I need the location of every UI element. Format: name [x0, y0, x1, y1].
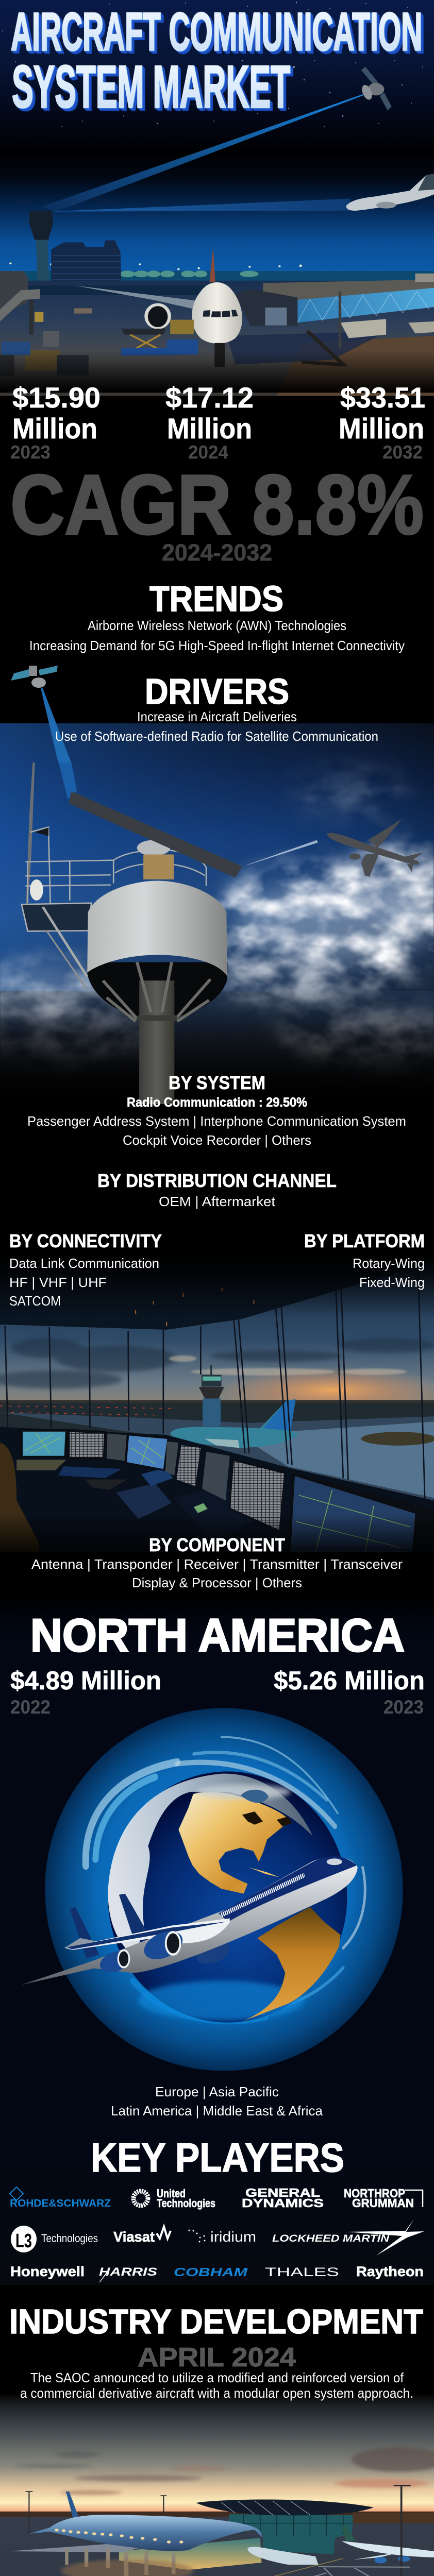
- platform item 1: Rotary-Wing: [353, 1256, 425, 1271]
- runway: [0, 1413, 434, 1500]
- sky: [0, 723, 434, 1105]
- stat 2032: Million: [339, 412, 424, 445]
- date: april 2024: APRIL 2024: [138, 2343, 296, 2372]
- canopy roof: [196, 2500, 374, 2515]
- horizon land: [0, 2512, 434, 2524]
- runway strip: [28, 285, 205, 295]
- logo: Harris: HARRIS: [99, 2265, 157, 2278]
- logo: United Technologies: United: [157, 2187, 186, 2200]
- far engine: [194, 1938, 232, 1968]
- distribution list: OEM | Aftermarket: [159, 1194, 276, 1209]
- year 2022: 2022: [10, 1697, 51, 1718]
- tail fin lower: [70, 1907, 99, 1958]
- icon: small satellite: [11, 666, 58, 688]
- tail fin upper: [119, 1894, 147, 1935]
- logo: Thales: THALES: [265, 2265, 339, 2279]
- blue uplink beam: [59, 762, 77, 799]
- window strip: [222, 1875, 305, 1915]
- title: [11, 2, 422, 120]
- rear engine intake: [118, 1950, 129, 1968]
- tower pole: [139, 980, 174, 1104]
- lower fade: [0, 1010, 434, 1105]
- panel: trends: [29, 579, 405, 653]
- Greenland and Arctic: [241, 1790, 269, 1803]
- logo: Lockheed Martin: LOCKHEED MARTIN: [272, 2233, 390, 2244]
- terminal building: [51, 241, 121, 285]
- satellite beam: [41, 688, 71, 762]
- back building mullions: [230, 2515, 352, 2536]
- swirl streaks: [86, 1737, 365, 2021]
- panel: north america heading and values: [10, 1610, 425, 1718]
- logo: Viasat: [113, 2227, 171, 2245]
- logo: Iridium: iridium: [210, 2229, 256, 2245]
- railing platform: [25, 827, 206, 903]
- driver item 1: Increase in Aircraft Deliveries: [137, 709, 297, 724]
- stat 2023: Million: [12, 412, 97, 445]
- logo: Lockheed Martin: [272, 2219, 424, 2256]
- Arctic haze over land: [196, 1785, 291, 1799]
- window mullions: [5, 1264, 425, 1500]
- radar drum: [87, 881, 227, 977]
- apron markings: [293, 2567, 410, 2576]
- left terminal gate and stairs: [0, 271, 40, 335]
- heading: connectivity: BY CONNECTIVITY: [9, 1230, 162, 1251]
- panel: industry development: [9, 2302, 423, 2401]
- logo: General Dynamics: GENERAL: [245, 2186, 320, 2199]
- sky through windows: [0, 1261, 434, 1403]
- panel: by distribution channel: [97, 1170, 337, 1209]
- console keyboards: [16, 1460, 263, 1543]
- logo: Rohde & Schwarz: [10, 2187, 111, 2209]
- globe cloud haze: [108, 1774, 313, 1958]
- logo: Honeywell: Honeywell: [10, 2264, 85, 2279]
- passenger boarding bridge: [235, 274, 434, 365]
- panel: airport terminal sunset: [0, 2285, 434, 2576]
- system list 1: Passenger Address System | Interphone Communication System: [27, 1113, 406, 1129]
- logo: Raytheon: Raytheon: [356, 2264, 424, 2279]
- panel: control room photo: [0, 1252, 434, 1552]
- right airliner: [342, 2526, 434, 2564]
- deck: [22, 903, 91, 989]
- logo: L3 Technologies: Technologies: [41, 2232, 98, 2245]
- blue sky tint: [0, 723, 434, 991]
- near engine: [141, 1926, 186, 1964]
- ceiling: [0, 1253, 434, 1330]
- horizon lights: [0, 1400, 434, 1427]
- stat 2024: $17.12: [165, 381, 254, 414]
- console desk: [0, 1427, 434, 1552]
- apron far edge on right: [353, 2513, 434, 2523]
- stat 2032: [339, 381, 425, 463]
- wet apron: [238, 1421, 434, 1498]
- panel: by component: [0, 1534, 434, 1595]
- panel: market size stats: [10, 381, 425, 566]
- starfield: [2, 2, 423, 127]
- logo: United Technologies: [133, 2187, 215, 2210]
- North America landmass: [178, 1792, 291, 1894]
- signal beam tower to satellite: [42, 94, 363, 212]
- globe ocean: [108, 1771, 347, 2023]
- panel: by system: [27, 1072, 406, 1148]
- trend item 1: Airborne Wireless Network (AWN) Technologies: [88, 618, 346, 633]
- regions line 1: Europe | Asia Pacific: [155, 2084, 279, 2099]
- soft cloud base: [0, 855, 434, 1015]
- heading: north america: NORTH AMERICA: [30, 1610, 405, 1662]
- heading: by system: BY SYSTEM: [169, 1072, 265, 1093]
- development text line 1: The SAOC announced to utilize a modified and reinforced version of: [30, 2370, 404, 2385]
- radar antenna bar: [69, 791, 242, 877]
- value 2023: $5.26 Million: [274, 1666, 425, 1695]
- year 2023: 2023: [383, 1697, 424, 1718]
- regions line 2: Latin America | Middle East & Africa: [111, 2103, 323, 2119]
- platform item 2: Fixed-Wing: [359, 1275, 425, 1290]
- development text line 2: a commercial derivative aircraft with a modular open system approach.: [20, 2385, 413, 2401]
- wing: [65, 1919, 230, 1950]
- lower ocean glow: [138, 1981, 305, 2020]
- stat 2024: [165, 381, 254, 463]
- airfield ground: [0, 1401, 434, 1437]
- CAGR period: 2024-2032: [162, 539, 272, 566]
- radar antenna pedestal: [137, 840, 174, 879]
- ceiling lights: [135, 1287, 255, 1326]
- panel: drivers: [11, 666, 378, 762]
- icon: satellite: [360, 66, 392, 110]
- panel: key players: [10, 2134, 424, 2282]
- light clouds: [169, 1355, 407, 1376]
- top fade: [0, 1252, 434, 1318]
- panel: other regions: [111, 2084, 323, 2119]
- terminal wing lower: [8, 2544, 138, 2552]
- blue airliner outside: [170, 1399, 299, 1448]
- sunset clouds: [14, 2447, 434, 2495]
- wing navy line: [66, 1922, 227, 1949]
- apron dark shadow: [227, 331, 388, 365]
- aircraft over clouds: [327, 819, 424, 877]
- lit lower hall: [119, 2538, 261, 2570]
- stat 2024: 2024: [188, 442, 228, 463]
- icon: aircraft in flight: [346, 174, 434, 211]
- Great Lakes: [242, 1811, 292, 1826]
- heading: drivers: DRIVERS: [145, 671, 289, 711]
- heading: platform: BY PLATFORM: [304, 1230, 425, 1251]
- panel: by platform: [304, 1230, 425, 1290]
- logo: L3 Technologies: [11, 2226, 98, 2252]
- main aircraft-shaped terminal roof: [29, 2515, 262, 2551]
- pole struts: [103, 962, 210, 1021]
- parked airliner: [75, 247, 242, 367]
- grass island: [361, 1432, 434, 1446]
- component list 1: Antenna | Transponder | Receiver | Transmitter | Transceiver: [31, 1556, 403, 1572]
- apron: [0, 2517, 434, 2576]
- fuselage navy top: [219, 1856, 356, 1922]
- connectivity item 3: SATCOM: [9, 1293, 61, 1309]
- Caribbean islands: [249, 1868, 279, 1877]
- trend item 2: Increasing Demand for 5G High-Speed In-flight Internet Connectivity: [29, 638, 405, 653]
- logo: General Dynamics: [242, 2186, 324, 2210]
- ground support equipment: [0, 308, 198, 376]
- distant control tower: [199, 1365, 224, 1426]
- city lights horizon: [0, 262, 434, 282]
- logo: Northrop Grumman: GRUMMAN: [352, 2196, 414, 2210]
- system list 2: Cockpit Voice Recorder | Others: [123, 1132, 311, 1148]
- apron ground: [0, 281, 434, 396]
- heading: distribution channel: BY DISTRIBUTION CHANNEL: [97, 1170, 337, 1191]
- connectivity item 1: Data Link Communication: [9, 1256, 159, 1271]
- glow on apron: [61, 2560, 194, 2576]
- orange chair: [0, 1443, 39, 1552]
- panel: regional globe: [0, 1595, 434, 2285]
- monitor map lines: [25, 1433, 410, 1552]
- logo: United Technologies: Technologies: [157, 2197, 215, 2210]
- black strip under radar: [0, 1105, 434, 1253]
- pole collar: [137, 1015, 177, 1021]
- logo: Iridium: [189, 2229, 256, 2245]
- near engine intake: [166, 1932, 180, 1955]
- fuselage: [22, 1857, 358, 1985]
- black band below photo: [0, 1552, 434, 1595]
- panel: by connectivity: [9, 1230, 162, 1309]
- panel: radar tower photo: [0, 723, 434, 1105]
- small dome: [30, 879, 43, 901]
- logo: Northrop Grumman: NORTHROP: [344, 2187, 405, 2200]
- dark navy backdrop: [0, 1595, 434, 2285]
- logo: L3 Technologies: L3: [15, 2230, 32, 2252]
- logo: General Dynamics: DYNAMICS: [242, 2196, 324, 2210]
- contrail: [245, 840, 318, 866]
- sunset glow: [216, 1366, 434, 1414]
- monitors: [20, 1429, 434, 1552]
- back building glass: [229, 2514, 353, 2554]
- tailplane: [64, 1938, 97, 1948]
- bottom fade: [0, 1514, 434, 1552]
- logo: Rohde & Schwarz: ROHDE&SCHWARZ: [10, 2198, 111, 2209]
- stat 2023: $15.90: [12, 381, 101, 414]
- value 2022: $4.89 Million: [10, 1666, 161, 1695]
- panel: hero airport illustration: [0, 0, 434, 396]
- rear engine: [98, 1947, 132, 1976]
- light poles: [25, 2485, 411, 2576]
- sunset sky: [0, 2285, 434, 2514]
- terminal columns: [65, 2548, 175, 2576]
- dark storm clouds: [0, 1338, 434, 1388]
- roof lights row: [55, 2529, 183, 2544]
- fade to black: [0, 350, 434, 393]
- glowing orb: [45, 1708, 403, 2071]
- plane tail fin: [66, 2492, 81, 2526]
- stat 2032: $33.51: [340, 381, 425, 414]
- driver item 2: Use of Software-defined Radio for Satellite Communication: [55, 728, 378, 744]
- stat 2023: 2023: [10, 442, 51, 463]
- canopy ribs: [222, 2501, 310, 2515]
- component list 2: Display & Processor | Others: [132, 1575, 302, 1590]
- apron brick area: [277, 336, 434, 396]
- logo: Harris: [99, 2265, 157, 2282]
- night sky backdrop: [0, 0, 434, 289]
- heading: trends: TRENDS: [149, 579, 283, 619]
- stat 2032: 2032: [382, 442, 423, 463]
- control tower: [29, 211, 53, 285]
- stat 2023: [10, 381, 101, 463]
- connectivity item 2: HF | VHF | UHF: [9, 1275, 107, 1290]
- heading: key players: KEY PLAYERS: [91, 2134, 344, 2180]
- logo: Cobham: COBHAM: [174, 2265, 248, 2279]
- logo: Northrop Grumman: [344, 2187, 423, 2210]
- heading: component: BY COMPONENT: [149, 1534, 285, 1555]
- drum underside: [87, 962, 227, 1019]
- radar mast: [26, 762, 35, 904]
- logo: Viasat: Viasat: [113, 2229, 155, 2245]
- clouds: [0, 761, 434, 1072]
- leading system share: Radio Communication : 29.50%: [127, 1095, 307, 1110]
- front airliner: [247, 2547, 319, 2565]
- South America landmass: [244, 1907, 341, 2021]
- airliner: [22, 1856, 358, 1985]
- flag: [35, 827, 48, 836]
- signal beam tower to aircraft: [50, 199, 350, 212]
- stat 2024: Million: [167, 412, 252, 445]
- cockpit: [327, 1858, 342, 1865]
